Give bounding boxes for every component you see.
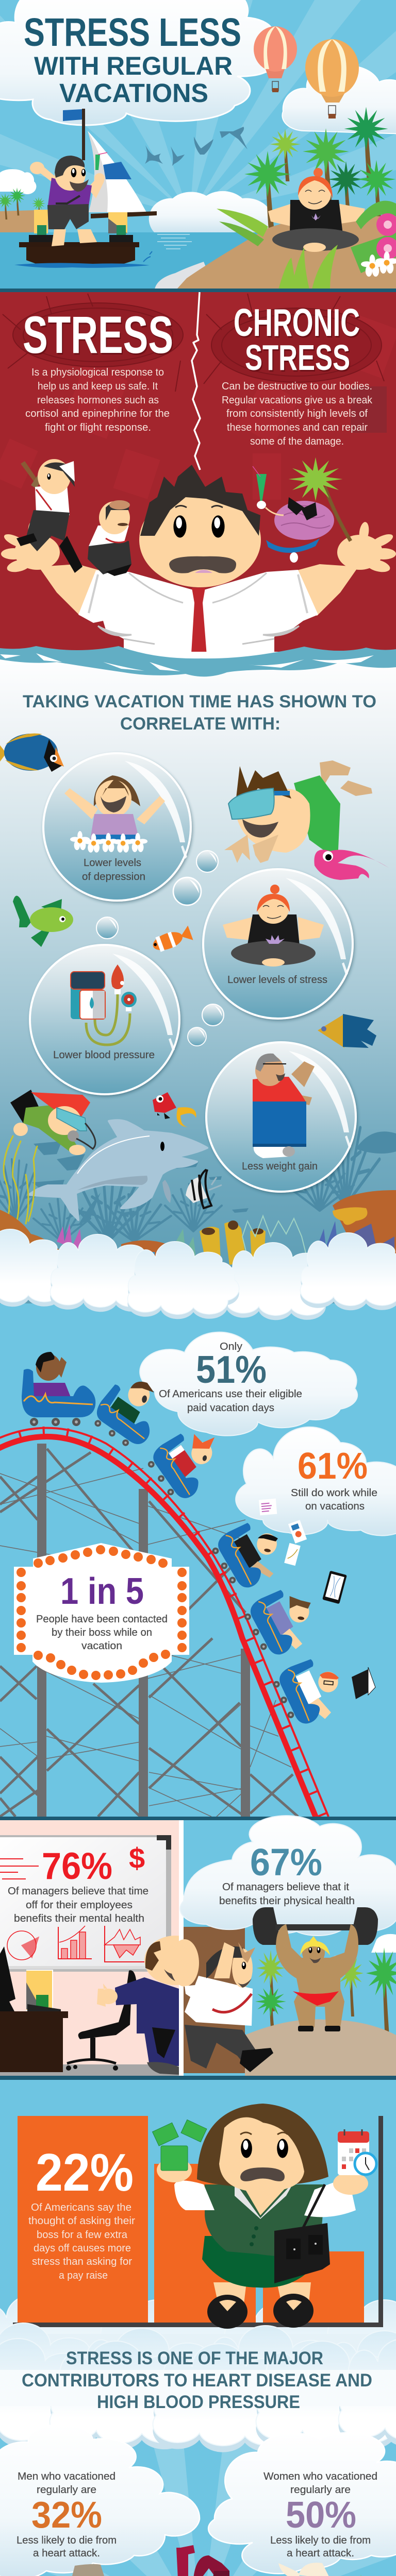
- label: of depression: [82, 871, 145, 883]
- office chair: [66, 1970, 137, 2071]
- character: giant stressed man: [1, 465, 396, 665]
- window frame: [13, 2116, 383, 2327]
- coaster car: man with tablet: [240, 1578, 329, 1664]
- text: 1 in 5: by their boss while on: [52, 1627, 152, 1638]
- title: WITH REGULAR: [34, 52, 233, 80]
- character: manager in blue suit: [97, 1936, 206, 2075]
- orange panels: [18, 2116, 364, 2323]
- heading: chronic stress: [234, 301, 360, 378]
- text: women statistic: 50%: [286, 2495, 356, 2536]
- icon: dollar sign: $: [129, 1842, 145, 1874]
- left island: [0, 188, 46, 232]
- text: 51 percent: [159, 1341, 302, 1414]
- title: STRESS LESS: [24, 10, 241, 55]
- icon: pink fish: [314, 850, 389, 880]
- door: [184, 1927, 245, 2073]
- icon: blue fish: [0, 734, 64, 772]
- label: Lower levels of stress: [227, 974, 327, 986]
- coaster car: woman: [22, 1352, 95, 1426]
- text: men statistic: 32%: [31, 2495, 102, 2536]
- text: chronic stress description: some of the damage.: [250, 436, 344, 447]
- clouds behind window: [0, 2295, 396, 2411]
- character: man with club: [16, 459, 82, 573]
- text: 61 percent: Still do work while: [291, 1487, 377, 1499]
- icon: calendar and clock: [333, 2129, 376, 2195]
- seabed silhouettes: [0, 1120, 396, 1242]
- cloud: 61 percent: [236, 1427, 396, 1536]
- text: chronic stress description: [222, 381, 373, 447]
- cloud: 51 percent: [140, 1332, 357, 1436]
- heading: taking vacation time: CORRELATE WITH:: [120, 714, 280, 734]
- text: 51 percent: Only: [220, 1341, 242, 1352]
- text: chronic stress description: Can be destructive to our bodies.: [222, 381, 372, 392]
- text: 61 percent: on vacations: [305, 1501, 365, 1512]
- roller coaster track: [0, 1428, 328, 1817]
- text: 22 percent: Of Americans say the: [31, 2202, 131, 2213]
- title: [24, 10, 241, 108]
- cloud: 67 percent: [180, 1816, 396, 1936]
- text: 22 percent: thought of asking their: [28, 2215, 135, 2227]
- text: 22 percent: 22%: [36, 2143, 134, 2202]
- roller coaster supports: [0, 1444, 298, 1817]
- character: woman with sun hat: [242, 2563, 387, 2576]
- cloud: women: [208, 2433, 396, 2573]
- text: 1 in 5: vacation: [81, 1640, 122, 1652]
- coaster car: man in black suit: [208, 1511, 294, 1596]
- section band: [0, 1817, 396, 1821]
- foreground plants and flowers: [278, 201, 396, 289]
- bubble: lower blood pressure: [30, 945, 179, 1094]
- text: 1 in 5: People have been contacted: [36, 1614, 168, 1625]
- section band: [0, 2076, 396, 2080]
- character: worried woman: [174, 2104, 356, 2329]
- text: 22 percent: days off causes more: [34, 2243, 131, 2254]
- label: Lower levels: [84, 857, 141, 869]
- text: stress description: fight or flight response.: [45, 422, 151, 433]
- text: chronic stress description: Regular vacations give us a break: [222, 395, 373, 406]
- text: 1 in 5: 1 in 5: [60, 1571, 144, 1612]
- text: chronic stress description: from consistently high levels of: [226, 408, 368, 419]
- coaster car: red-haired rider: [143, 1417, 236, 1506]
- character: happy heart: [161, 2545, 246, 2576]
- text: chronic stress description: these hormones and can repair: [227, 422, 368, 433]
- text: women statistic: [263, 2471, 377, 2559]
- text: stress description: help us and keep us safe. It: [38, 381, 158, 392]
- text: 61 percent: [291, 1446, 377, 1512]
- section band: [0, 289, 396, 293]
- character: strongman: [253, 1907, 378, 2031]
- text: 76 percent: benefits their mental health: [14, 1913, 144, 1924]
- panel: underwater benefits: [0, 646, 396, 1316]
- text: 76 percent: Of managers believe that time: [8, 1886, 148, 1897]
- text: 67 percent: Of managers believe that it: [222, 1882, 349, 1893]
- icon: blood pressure monitor: [71, 964, 137, 1045]
- text: 76 percent: [8, 1845, 148, 1924]
- label: Lower blood pressure: [53, 1049, 155, 1061]
- text: women statistic: a heart attack.: [287, 2548, 354, 2559]
- whiteboard: [0, 1835, 171, 1972]
- panel: 67 percent physical health: [170, 1816, 396, 2076]
- birds: [145, 127, 248, 166]
- text: 76 percent: off for their employees: [26, 1900, 133, 1911]
- hero scene: [0, 0, 396, 289]
- text: men statistic: regularly are: [37, 2484, 96, 2496]
- text: stress description: cortisol and epinephrine for the: [25, 408, 170, 419]
- clouds: heart heading backdrop: [0, 2323, 396, 2439]
- text: stress description: releases hormones such as: [37, 395, 159, 406]
- text: men statistic: a heart attack.: [33, 2548, 100, 2559]
- cloud: title cloud: [0, 0, 285, 125]
- palms and sand: [0, 2575, 396, 2576]
- text: 51 percent: paid vacation days: [187, 1402, 274, 1414]
- text: 51 percent: Of Americans use their eligible: [159, 1388, 302, 1400]
- cloud: men: [0, 2425, 200, 2576]
- crack: [192, 292, 200, 470]
- marquee sign: 1 in 5: [14, 1543, 189, 1683]
- icon: tablet: [322, 1571, 347, 1604]
- right island: [155, 107, 396, 289]
- icon: angel fish: [318, 1014, 376, 1048]
- seaweed: [4, 1136, 37, 1226]
- icon: red crab fish: [153, 1092, 196, 1127]
- text: men statistic: Men who vacationed: [18, 2471, 116, 2482]
- coral: reef centre: [57, 1216, 394, 1265]
- text: 67 percent: [219, 1841, 355, 1907]
- cloud: small left: [0, 169, 36, 194]
- coaster car: bearded man: [88, 1364, 176, 1454]
- character: man in hawaiian shirt: [10, 2564, 162, 2576]
- character: man holding head: [88, 500, 131, 576]
- sea: [0, 232, 396, 289]
- clouds: bottom of backdrop: [0, 2338, 396, 2452]
- sky: coaster section: [0, 1303, 396, 1817]
- bubble: lower levels of depression: [43, 753, 191, 901]
- character: running worker: [170, 1939, 273, 2072]
- heading: stress: STRESS: [23, 306, 173, 364]
- text: 1 in 5: [36, 1571, 168, 1652]
- divider: [179, 1820, 184, 2076]
- icon: green fish: [13, 896, 73, 947]
- label: [82, 857, 145, 883]
- sky: heart section: [0, 2411, 396, 2576]
- bubble: less weight gain: [206, 1042, 356, 1192]
- scribble: behind chronic stress title: [204, 294, 384, 384]
- text: men statistic: [16, 2471, 117, 2559]
- cloud: horizon: [149, 191, 272, 232]
- heading: chronic stress: STRESS: [245, 337, 350, 378]
- heading: taking vacation time: TAKING VACATION TIME HAS SHOWN TO: [23, 692, 376, 711]
- panel: 22 percent: [0, 2080, 396, 2411]
- text: stress description: Is a physiological response to: [31, 367, 164, 378]
- text: 51 percent: 51%: [196, 1348, 267, 1391]
- heading: taking vacation time: [23, 692, 376, 734]
- heading: stress contributors: STRESS IS ONE OF THE MAJOR: [66, 2348, 323, 2368]
- icon: orange balloon: [305, 39, 359, 118]
- coaster car: man with laptop: [269, 1649, 355, 1733]
- cloud: right sky: [282, 66, 396, 134]
- title: VACATIONS: [59, 78, 208, 108]
- text: 22 percent: [28, 2143, 135, 2281]
- character: man on boat: [30, 152, 107, 246]
- panel: stress versus chronic stress: [0, 292, 396, 665]
- text: women statistic: Less likely to die from: [270, 2535, 371, 2546]
- heading: stress contributors: HIGH BLOOD PRESSURE: [97, 2392, 300, 2412]
- desk with computer: [0, 1946, 179, 2076]
- character: man with loose jeans: [253, 1054, 315, 1158]
- character: happy woman: [64, 775, 165, 853]
- palm trees: [255, 1947, 396, 2039]
- icon: clown fish: [151, 926, 193, 954]
- heading: stress contributors: CONTRIBUTORS TO HEART DISEASE AND: [22, 2370, 372, 2391]
- icon: dolphin: [29, 1120, 207, 1220]
- character: meditating woman: [268, 168, 365, 252]
- text: 22 percent: stress than asking for: [32, 2256, 132, 2267]
- text: stress description: [25, 367, 170, 433]
- text: men statistic: Less likely to die from: [16, 2535, 117, 2546]
- icon: striped angelfish: [186, 1170, 222, 1208]
- character: scuba diver: [10, 1090, 95, 1155]
- icon: red balloon: [254, 26, 297, 92]
- icon: flying documents: [259, 1499, 307, 1566]
- label: Less weight gain: [242, 1161, 318, 1172]
- icon: laptop: [352, 1667, 375, 1699]
- coral: left: [0, 1210, 62, 1262]
- text: 22 percent: a pay raise: [59, 2270, 108, 2281]
- water line: [0, 646, 396, 676]
- icon: snorkeling man: [224, 760, 372, 863]
- sailboat: [14, 109, 157, 268]
- text: women statistic: regularly are: [290, 2484, 351, 2496]
- bubble: lower levels of stress: [203, 869, 353, 1019]
- scribble: behind stress title: [3, 294, 183, 392]
- character: yoga woman: [223, 885, 324, 967]
- text: 22 percent: boss for a few extra: [37, 2229, 128, 2241]
- scribbles: [0, 1859, 39, 1879]
- text: 61 percent: 61%: [298, 1446, 368, 1487]
- coral: right: [333, 1190, 396, 1257]
- character: relaxed brain in hammock: [253, 457, 351, 563]
- charts: whiteboard sketches: [7, 1926, 144, 1962]
- bubbles: decorative air bubbles: [96, 851, 224, 1046]
- text: 67 percent: 67%: [250, 1841, 322, 1884]
- sand: [245, 2019, 396, 2076]
- panel: 76 percent mental health: [0, 1820, 206, 2076]
- text: 76 percent: 76%: [42, 1845, 112, 1887]
- cloud bank: [0, 1229, 396, 1320]
- heading: stress contributors: [22, 2348, 372, 2412]
- icon: money: [153, 2120, 207, 2182]
- text: women statistic: Women who vacationed: [263, 2471, 377, 2482]
- text: 67 percent: benefits their physical health: [219, 1895, 355, 1907]
